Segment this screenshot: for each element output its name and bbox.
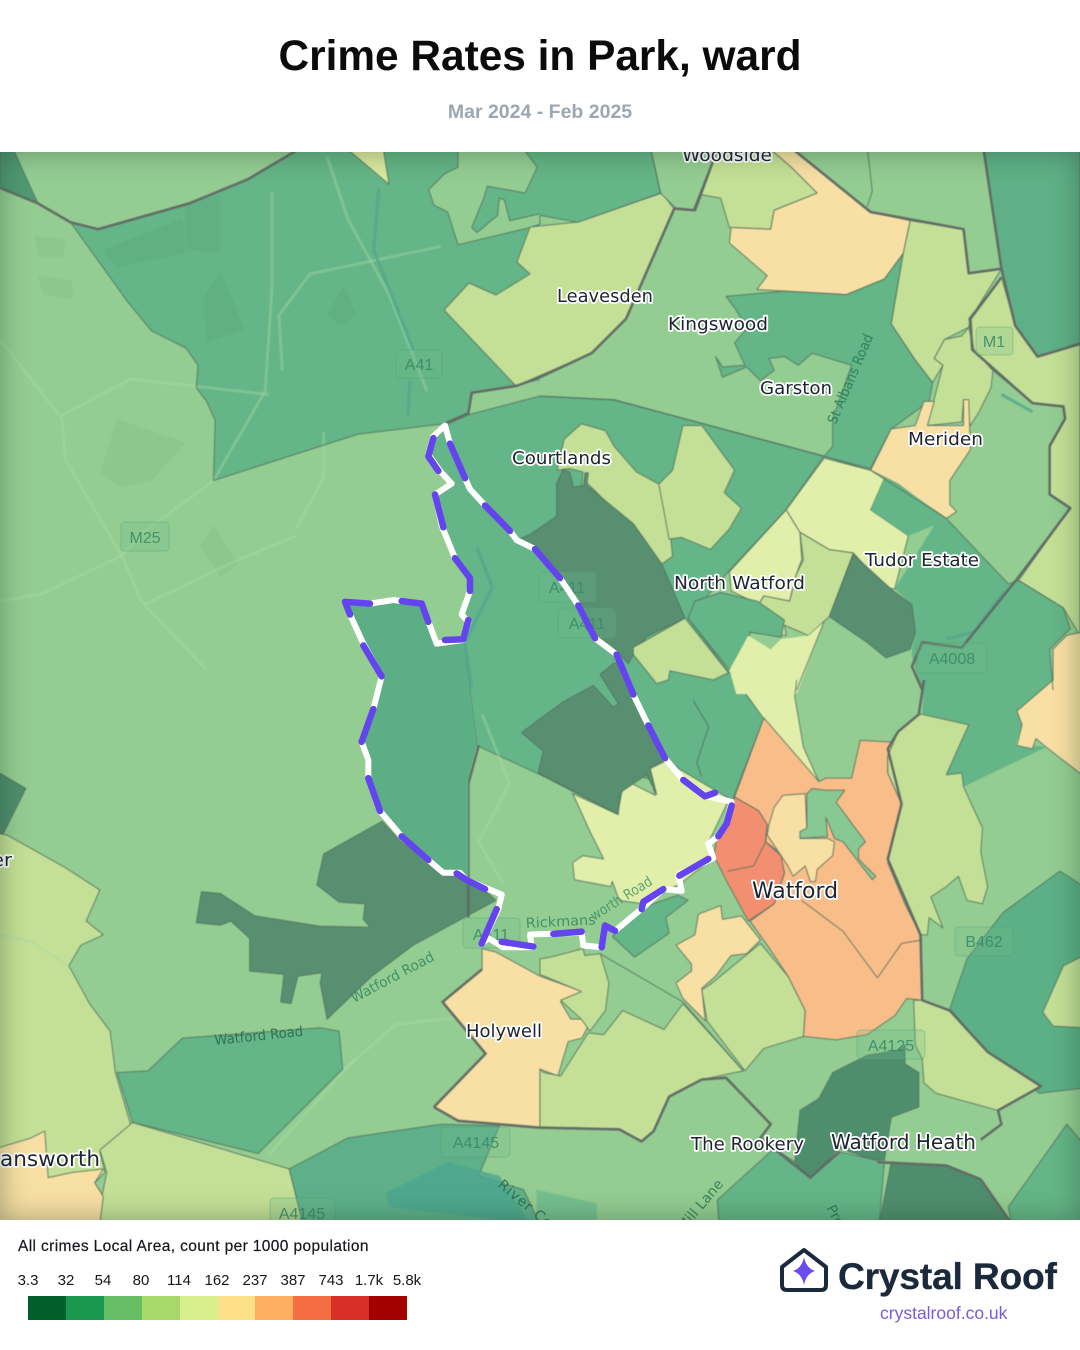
place labels: Courtlands <box>512 448 611 469</box>
place labels: Leavesden <box>557 286 653 307</box>
place labels: Kingswood <box>668 314 768 335</box>
road names: River Colne <box>494 1177 575 1248</box>
legend values: 5.8k <box>393 1272 421 1289</box>
date range subtitle: Mar 2024 - Feb 2025 <box>448 101 632 123</box>
place labels: The Rookery <box>690 1134 804 1155</box>
place labels <box>0 145 983 1171</box>
north-east areas <box>539 147 1080 694</box>
legend <box>18 1238 422 1320</box>
ward fill <box>345 600 477 880</box>
legend values: 80 <box>133 1272 149 1289</box>
rivers and roads <box>0 157 492 687</box>
place labels: Watford <box>752 879 838 904</box>
legend values: 114 <box>167 1272 191 1289</box>
legend values: 162 <box>204 1272 230 1289</box>
road shields: A411 <box>569 616 605 633</box>
road shields: A411 <box>473 927 509 944</box>
road shields: M1 <box>983 334 1005 351</box>
map area polygons <box>0 147 1080 1224</box>
road names: St Albans Road <box>825 332 877 427</box>
legend values <box>18 1272 422 1289</box>
place labels: Tudor Estate <box>864 550 979 571</box>
road names: Watford Road <box>214 1024 304 1049</box>
road names: worth Road <box>588 874 655 924</box>
road names <box>214 332 877 1248</box>
legend values: 3.3 <box>18 1272 38 1289</box>
legend values: 54 <box>95 1272 111 1289</box>
Leavesden area <box>444 193 674 386</box>
legend values: 743 <box>318 1272 344 1289</box>
road shields: A41 <box>405 357 433 374</box>
title: Crime Rates in Park, ward <box>278 32 802 79</box>
road names: Pro <box>822 1202 847 1229</box>
south-west areas <box>0 771 592 1224</box>
place labels: Woodside <box>682 145 772 166</box>
place labels: Holywell <box>466 1021 542 1042</box>
road shields: A4145 <box>453 1135 499 1152</box>
legend values: 237 <box>242 1272 268 1289</box>
road shields <box>121 327 1013 1228</box>
legend title: All crimes Local Area, count per 1000 population <box>18 1238 369 1255</box>
road names: Watford Road <box>348 949 437 1007</box>
road shields: A411 <box>549 580 585 597</box>
legend values: 32 <box>58 1272 74 1289</box>
road shields: M25 <box>129 530 161 547</box>
land-use patches <box>34 195 356 577</box>
place labels: answorth <box>0 1147 100 1171</box>
website: crystalroof.co.uk <box>880 1303 1007 1323</box>
road names: Mill Lane <box>675 1177 727 1235</box>
thick boundary lines <box>0 147 540 424</box>
central areas <box>428 396 824 815</box>
road shields: A4145 <box>279 1206 325 1223</box>
icon: house with star <box>780 1248 828 1292</box>
choropleth map <box>0 152 1080 1220</box>
place labels: Garston <box>760 378 832 399</box>
road shields: A4008 <box>929 651 975 668</box>
ward boundary: Park <box>345 425 732 947</box>
place labels: North Watford <box>674 573 805 594</box>
south-east areas <box>537 632 1080 1224</box>
legend values: 1.7k <box>355 1272 383 1289</box>
place labels: Meriden <box>908 429 983 450</box>
road shields: A4125 <box>868 1038 914 1055</box>
dark areas beside the ward <box>517 469 728 815</box>
legend colour scale <box>28 1296 407 1320</box>
place labels: Watford Heath <box>831 1130 976 1154</box>
ward outline <box>345 425 732 947</box>
road names: Rickmans <box>525 912 596 932</box>
legend values: 387 <box>280 1272 306 1289</box>
logo <box>780 1248 1058 1323</box>
map edge shading <box>0 152 1080 1220</box>
road shields: B462 <box>965 934 1003 951</box>
wordmark: Crystal Roof <box>838 1255 1057 1297</box>
north-west areas <box>0 147 540 481</box>
